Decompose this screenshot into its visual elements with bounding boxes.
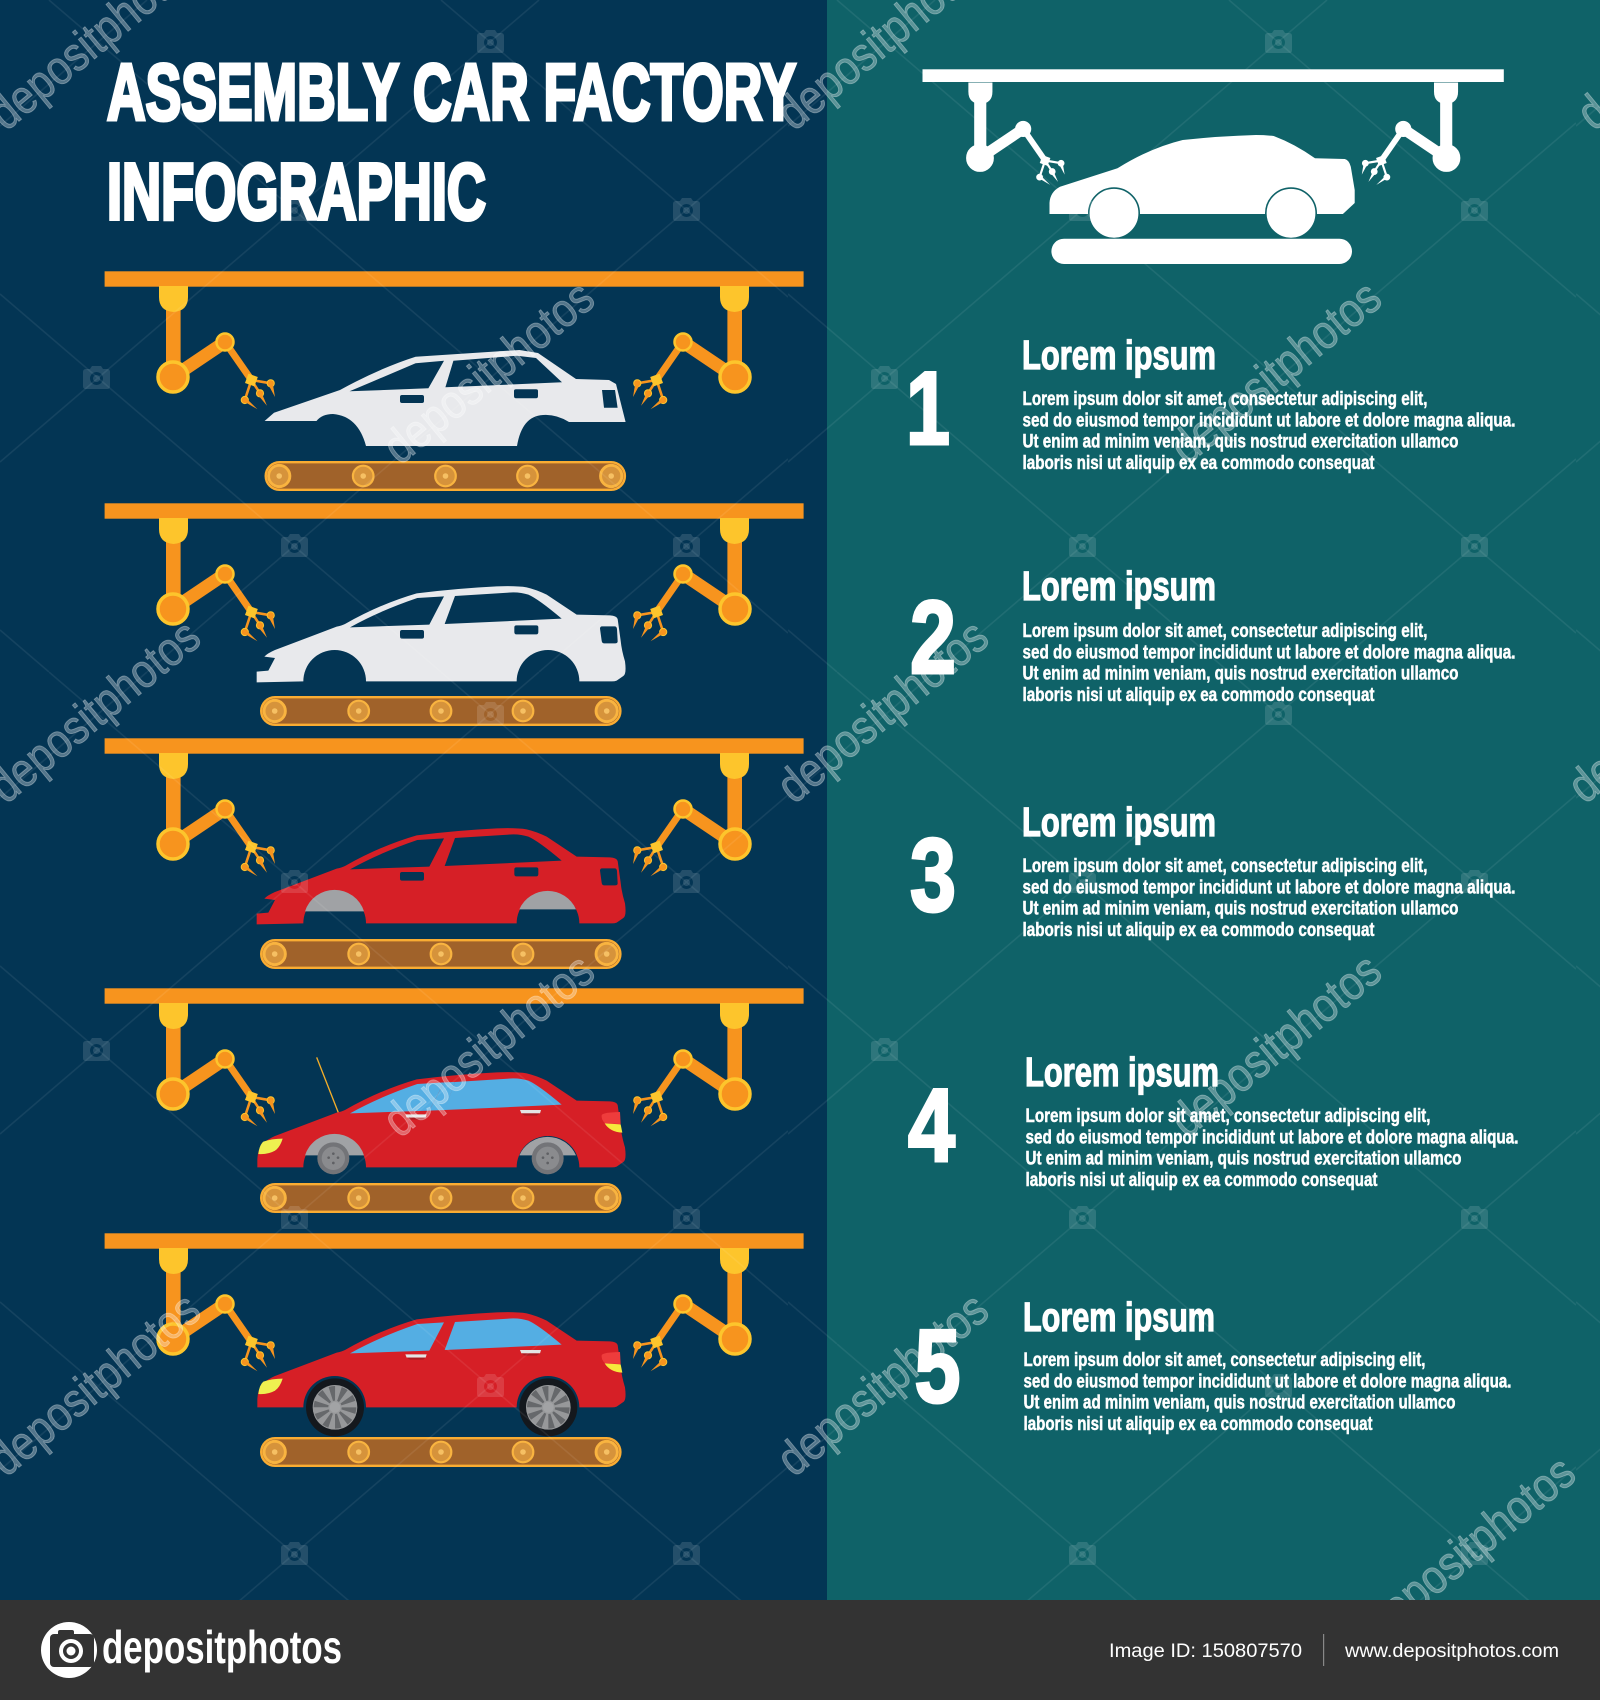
station 3: robot arms and rail — [105, 738, 804, 876]
car 5: finished red car — [257, 1312, 626, 1436]
step 1 — [906, 332, 1516, 474]
step 2 text — [1022, 563, 1516, 706]
car 2: white body with door openings — [257, 586, 626, 682]
conveyor 3 — [261, 940, 620, 968]
step 2 text: laboris nisi ut aliquip ex ea commodo consequat — [1022, 685, 1375, 706]
conveyor 4 — [261, 1184, 620, 1212]
number 5: 5 — [914, 1309, 960, 1425]
icon: white factory car silhouette — [922, 69, 1504, 264]
title — [107, 48, 796, 236]
step 3 text: Lorem ipsum dolor sit amet, consectetur adipiscing elit, — [1022, 856, 1428, 877]
step 3 — [910, 799, 1516, 941]
step 1 text — [1022, 332, 1516, 474]
title: INFOGRAPHIC — [107, 147, 486, 236]
step 5 text: Lorem ipsum — [1023, 1294, 1215, 1340]
step 4 text: Ut enim ad minim veniam, quis nostrud exercitation ullamco — [1026, 1148, 1462, 1170]
step 5 text — [1023, 1294, 1512, 1435]
station 2: robot arms and rail — [105, 503, 804, 641]
step 5 text: Ut enim ad minim veniam, quis nostrud exercitation ullamco — [1024, 1392, 1456, 1414]
car 1: bare white shell — [265, 350, 626, 446]
site url: www.depositphotos.com — [1344, 1641, 1559, 1662]
step 3 text — [1022, 799, 1516, 941]
step 1 text: Lorem ipsum dolor sit amet, consectetur adipiscing elit, — [1022, 389, 1428, 410]
number 2: 2 — [910, 580, 956, 696]
number 1: 1 — [906, 351, 950, 467]
title: ASSEMBLY CAR FACTORY — [107, 48, 796, 136]
car 3: painted red body — [257, 828, 626, 924]
step 4 text: Lorem ipsum dolor sit amet, consectetur adipiscing elit, — [1026, 1106, 1430, 1127]
step 3 text: Lorem ipsum — [1022, 799, 1216, 845]
step 3 text: Ut enim ad minim veniam, quis nostrud exercitation ullamco — [1022, 898, 1458, 920]
image id: Image ID: 150807570 — [1109, 1641, 1302, 1662]
conveyor 1 — [266, 462, 625, 490]
step 2 text: Lorem ipsum — [1022, 563, 1216, 609]
icon: stock logo camera — [41, 1622, 97, 1678]
station 5: robot arms and rail — [105, 1233, 804, 1371]
step 2 text: Ut enim ad minim veniam, quis nostrud exercitation ullamco — [1022, 664, 1458, 684]
logo wordmark: depositphotos — [102, 1621, 342, 1673]
step 5 text: Lorem ipsum dolor sit amet, consectetur adipiscing elit, — [1024, 1350, 1426, 1371]
car 4: red car with glass, antenna and small wheels — [257, 1057, 626, 1174]
panel: left navy background — [0, 0, 827, 1600]
step 4 — [908, 1049, 1518, 1191]
step 5 — [914, 1294, 1512, 1435]
step 3 text: laboris nisi ut aliquip ex ea commodo consequat — [1022, 920, 1375, 941]
step 4 text — [1025, 1049, 1518, 1191]
number 4: 4 — [908, 1068, 955, 1184]
conveyor 2 — [261, 697, 620, 725]
station 4: robot arms and rail — [105, 988, 804, 1126]
step 4 text: Lorem ipsum — [1025, 1049, 1219, 1095]
station 1: robot arms and rail — [105, 271, 804, 409]
step 1 text: Lorem ipsum — [1022, 332, 1216, 378]
footer bar — [0, 1600, 1600, 1700]
step 2 text: Lorem ipsum dolor sit amet, consectetur adipiscing elit, — [1022, 621, 1428, 642]
panel: right teal background — [827, 0, 1600, 1600]
conveyor 5 — [261, 1438, 620, 1466]
number 3: 3 — [910, 818, 956, 934]
step 2 — [910, 563, 1516, 706]
step 5 text: laboris nisi ut aliquip ex ea commodo consequat — [1024, 1414, 1373, 1435]
step 1 text: Ut enim ad minim veniam, quis nostrud exercitation ullamco — [1022, 432, 1458, 452]
step 4 text: laboris nisi ut aliquip ex ea commodo consequat — [1026, 1170, 1378, 1191]
step 1 text: laboris nisi ut aliquip ex ea commodo consequat — [1022, 453, 1375, 474]
